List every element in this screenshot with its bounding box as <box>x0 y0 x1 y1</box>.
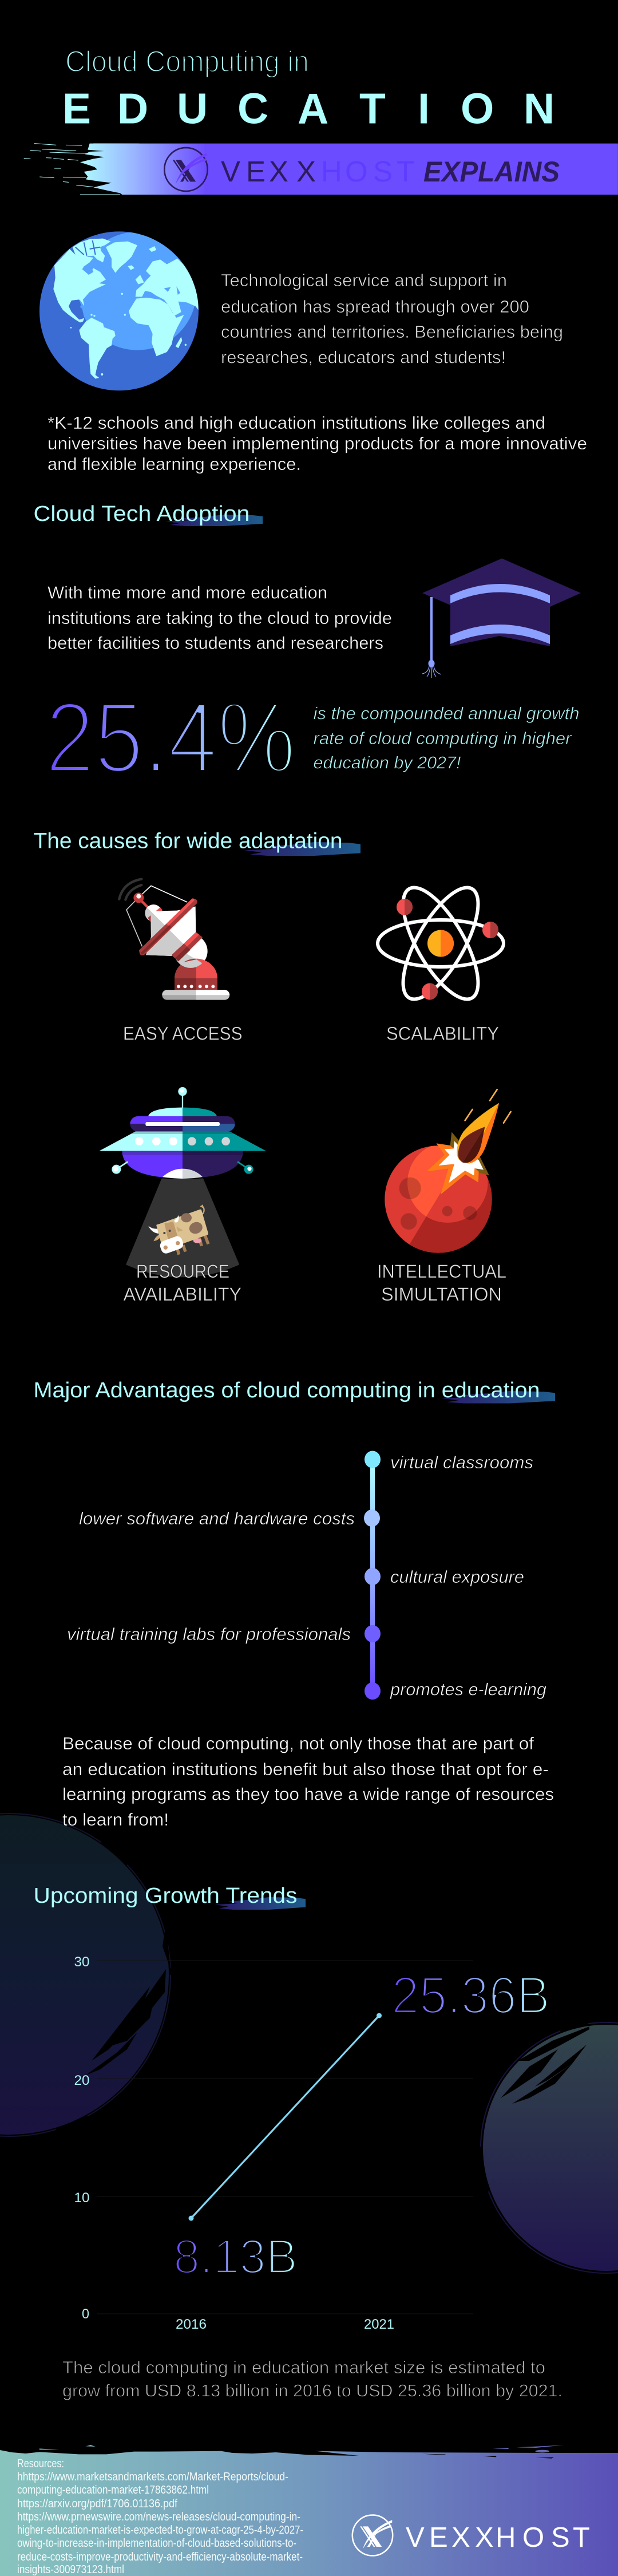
text: resources list <box>17 2458 303 2576</box>
stat: 25.4%: 25.4% <box>45 682 296 794</box>
label: RESOURCE AVAILABILITY: AVAILABILITY <box>124 1284 241 1305</box>
logotype: VEXXHOST: HOST <box>321 155 414 188</box>
label: SCALABILITY: SCALABILITY <box>386 1024 499 1044</box>
text: cloud adoption paragraph <box>47 583 392 653</box>
text: because of cloud computing paragraph: learning programs as they too have a wide range of resources <box>62 1784 554 1804</box>
text: because of cloud computing paragraph: an education institutions benefit but also those that opt for e- <box>62 1759 549 1779</box>
text: resources list: owing-to-increase-in-implementation-of-cloud-based-solutions-to- <box>17 2537 296 2550</box>
text: resources list: computing-education-market-17863862.html <box>17 2484 209 2496</box>
illustration: cow <box>148 1204 208 1255</box>
text: because of cloud computing paragraph: Because of cloud computing, not only those that are part of <box>62 1733 534 1753</box>
logotype: VEXXHOST: VEXX <box>221 155 316 188</box>
text: CAGR explanation: is the compounded annual growth <box>314 703 579 724</box>
axis labels: 30 <box>74 1954 89 1970</box>
text: market size explanation <box>62 2357 562 2401</box>
icon: meteor hitting planet <box>385 1089 512 1253</box>
text: because of cloud computing paragraph <box>62 1733 554 1830</box>
label: EXPLAINS: EXPLAINS <box>423 156 560 188</box>
icon: globe <box>39 231 199 390</box>
axis labels: 20 <box>74 2073 89 2088</box>
axis labels: 2021 <box>364 2317 394 2332</box>
stat: 8.13B: 8.13B <box>173 2230 298 2283</box>
heading: The causes for wide adaptation: The causes for wide adaptation <box>33 829 342 853</box>
text: because of cloud computing paragraph: to learn from! <box>62 1809 169 1830</box>
labels: advantages: virtual classrooms <box>390 1452 533 1472</box>
labels: advantages: lower software and hardware costs <box>79 1508 355 1528</box>
footer band <box>0 2445 618 2576</box>
logotype: VEXXHOST <box>221 155 414 188</box>
text: K-12 note: and flexible learning experience. <box>47 454 301 474</box>
text: market size explanation: The cloud computing in education market size is estimated to <box>62 2357 545 2377</box>
axis labels: 2016 <box>176 2317 207 2332</box>
labels: advantages: cultural exposure <box>390 1567 524 1587</box>
axis labels: 10 <box>74 2190 89 2206</box>
text: K-12 note: *K-12 schools and high education institutions like colleges and <box>47 413 545 433</box>
text: resources list: reduce-costs-improve-productivity-and-efficiency-absolute-market- <box>17 2551 303 2563</box>
text: technological service intro: researches, educators and students! <box>221 347 506 368</box>
text: technological service intro: countries and territories. Beneficiaries being <box>221 322 563 342</box>
chart: market growth line <box>74 1954 473 2332</box>
decorative planet: left <box>0 1814 171 2136</box>
title: Cloud Computing in: Cloud Computing in <box>65 45 309 78</box>
label: EASY ACCESS: EASY ACCESS <box>123 1024 243 1044</box>
text: CAGR explanation: rate of cloud computing in higher <box>314 728 572 748</box>
text: K-12 note: universities have been implementing products for a more innovative <box>47 433 587 453</box>
text: cloud adoption paragraph: institutions are taking to the cloud to provide <box>47 608 392 628</box>
text: CAGR explanation: education by 2027! <box>314 752 461 773</box>
label: INTELLECTUAL SIMULTATION: SIMULTATION <box>381 1284 502 1305</box>
icon: graduation cap <box>422 559 581 678</box>
labels: advantages <box>67 1452 546 1699</box>
icon: atom <box>378 877 504 1010</box>
text: technological service intro: education has spread through over 200 <box>221 297 529 317</box>
icon: UFO abducting cow <box>99 1087 266 1277</box>
icon: satellite dish <box>119 879 229 1000</box>
text: K-12 note <box>47 413 587 474</box>
axis labels: 0 <box>82 2306 89 2322</box>
logo: VEXXHOST white <box>352 2515 590 2556</box>
text: resources list: insights-300973123.html <box>17 2563 124 2576</box>
text: cloud adoption paragraph: With time more and more education <box>47 583 327 602</box>
text: resources list: https://www.prnewswire.com/news-releases/cloud-computing-in- <box>17 2511 300 2523</box>
stat: 25.36B: 25.36B <box>391 1966 550 2025</box>
text: resources list: https://arxiv.org/pdf/1706.01136.pdf <box>17 2498 177 2510</box>
icon: VEXXHOST logo mark <box>164 148 208 191</box>
text: resources list: higher-education-market-is-expected-to-grow-at-cagr-25-4-by-2027- <box>17 2524 303 2537</box>
logo: VEXXHOST white: VEXXHOST <box>406 2522 590 2553</box>
label: RESOURCE AVAILABILITY <box>124 1261 241 1305</box>
axis labels <box>74 1954 394 2332</box>
labels: advantages: virtual training labs for professionals <box>67 1624 351 1644</box>
labels: advantages: promotes e-learning <box>390 1680 546 1699</box>
label: INTELLECTUAL SIMULTATION: INTELLECTUAL <box>377 1261 506 1282</box>
text: technological service intro: Technological service and support in <box>221 270 507 290</box>
label: RESOURCE AVAILABILITY: RESOURCE <box>136 1261 229 1282</box>
title: EDUCATION: EDUCATION <box>62 85 554 133</box>
label: INTELLECTUAL SIMULTATION <box>377 1261 506 1305</box>
banner: VEXXHOST explains <box>24 144 618 195</box>
heading: Major Advantages: Major Advantages of cloud computing in education <box>33 1378 540 1402</box>
decorative planet: right <box>481 2022 618 2273</box>
text: CAGR explanation <box>314 703 579 773</box>
text: resources list: Resources: <box>17 2458 64 2470</box>
chart: advantages timeline <box>67 1451 546 1700</box>
heading: Upcoming Growth Trends: Upcoming Growth Trends <box>33 1884 298 1908</box>
text: market size explanation: grow from USD 8.13 billion in 2016 to USD 25.36 billion by 2021. <box>62 2380 562 2401</box>
text: cloud adoption paragraph: better facilities to students and researchers <box>47 633 383 653</box>
text: resources list: hhttps://www.marketsandmarkets.com/Market-Reports/cloud- <box>17 2471 288 2483</box>
text: technological service intro <box>221 270 563 368</box>
heading: Cloud Tech Adoption: Cloud Tech Adoption <box>33 502 249 526</box>
